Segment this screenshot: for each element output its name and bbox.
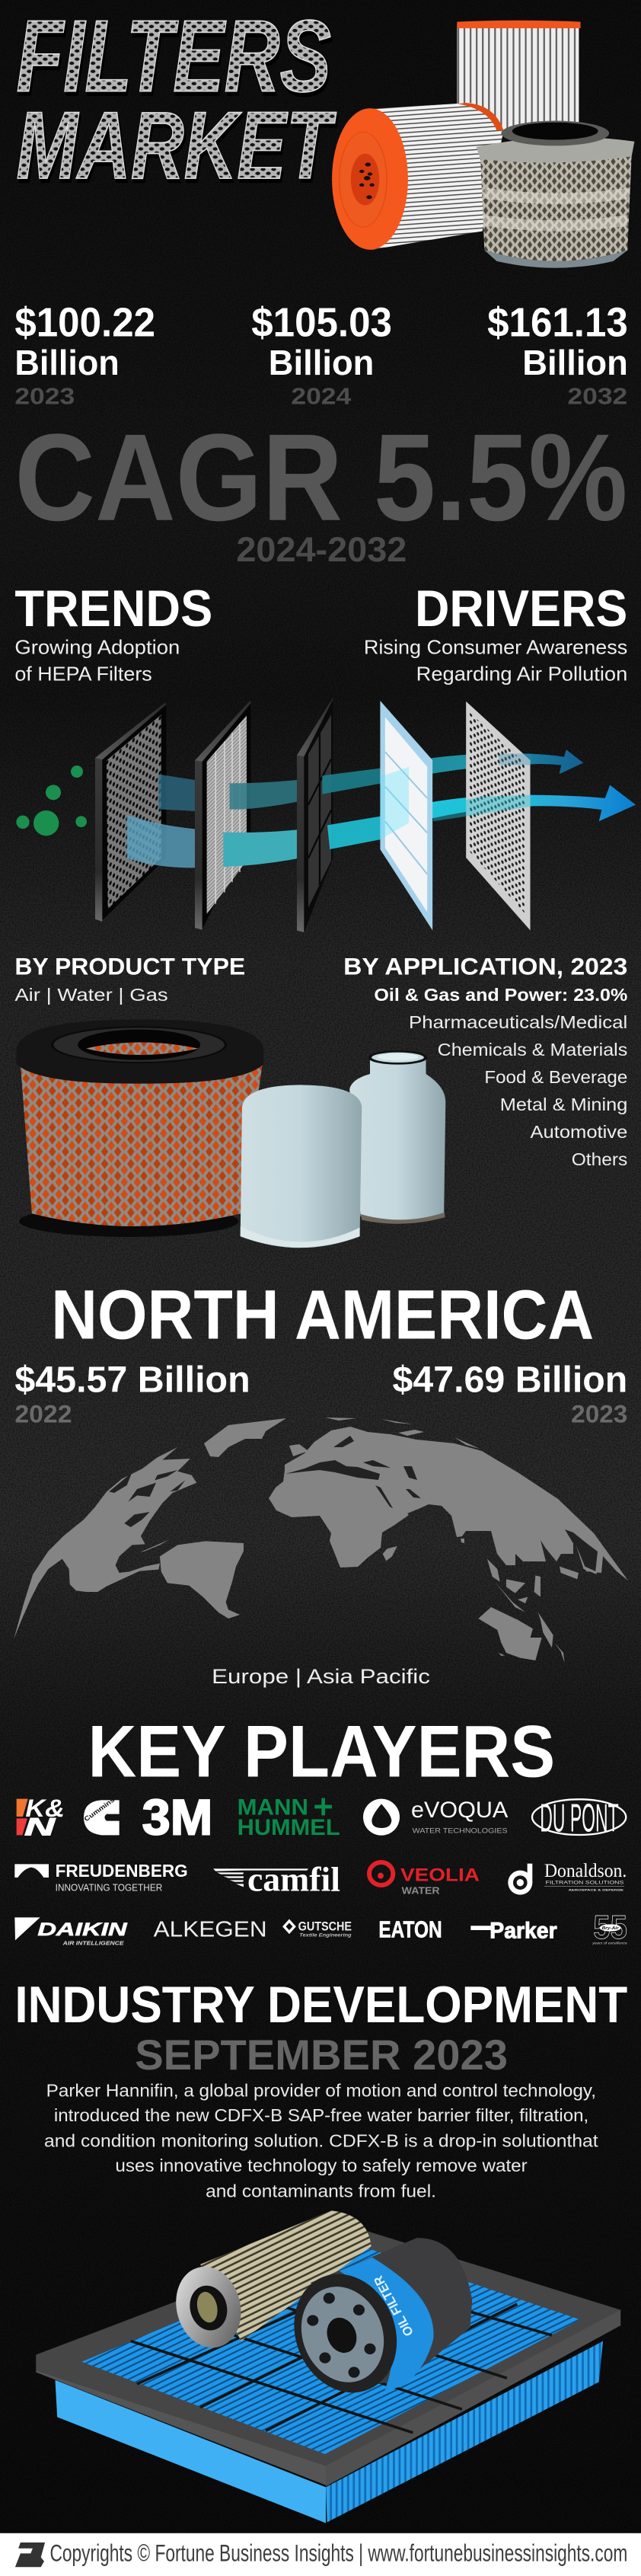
air flow bands through first layers [127, 766, 396, 868]
stat: 2032 value [487, 300, 628, 409]
logo: Veolia: VEOLIA [400, 1865, 480, 1885]
filter layer 2: pleated grey [195, 701, 251, 930]
block: drivers [364, 580, 627, 686]
logo: Donaldson: FILTRATION SOLUTIONS [546, 1880, 624, 1885]
logo: Parker: Parker [490, 1918, 557, 1943]
logo: Freudenberg: FREUDENBERG [56, 1861, 188, 1881]
uk and arctic slivers [289, 1444, 308, 1456]
islands and australia [383, 1539, 603, 1663]
title: Filters Market perforated metal lettering: MARKET [16, 92, 336, 199]
block: trends [14, 580, 212, 686]
illustration: air passing through filter layers [16, 698, 636, 932]
title: Filters Market perforated metal lettering: MARKET [18, 96, 338, 203]
logo: K&N: K& [25, 1795, 65, 1822]
logo: Daikin: DAIKIN [37, 1919, 128, 1940]
paragraph: and contaminants from fuel. [206, 2181, 436, 2201]
logo: Veolia: WATER [402, 1886, 440, 1897]
logo: Gutsche: Textile Engineering [299, 1933, 352, 1938]
stat: 2023 value [14, 300, 155, 409]
image: oil filter: OIL FILTER [371, 2274, 416, 2338]
block: trends: of HEPA Filters [14, 663, 152, 686]
logo: Gutsche [284, 1919, 352, 1938]
logo: K&N: N [24, 1813, 56, 1840]
greenland [204, 1418, 286, 1457]
world map [14, 1417, 628, 1663]
key players section [14, 1711, 627, 1946]
stat: 2024 value: Billion [269, 343, 374, 382]
icon: green particles [16, 765, 87, 836]
logo: Eaton: EATON [378, 1917, 442, 1943]
logo: Donaldson [508, 1861, 627, 1895]
stat: 2023 value: $100.22 [14, 300, 155, 345]
title and headline values [14, 0, 634, 409]
image: pleated cartridge filter [168, 2210, 372, 2354]
heading: by application list [343, 953, 627, 1169]
stat: 2022 [14, 1360, 250, 1428]
logo: Mann+Hummel: MANN [238, 1795, 308, 1820]
arrow: upper clean air [380, 749, 583, 785]
block: trends: Growing Adoption [14, 636, 180, 659]
stat: 2024 value [251, 300, 392, 409]
logo: Gutsche: GUTSCHE [298, 1919, 352, 1933]
logo: 3M: 3M [142, 1789, 212, 1846]
logo: Cummins: Cummins [83, 1796, 116, 1823]
logo: Bry-Air 55 years: 55 [593, 1910, 627, 1946]
heading: by product type: BY PRODUCT TYPE [14, 953, 245, 980]
logo: Freudenberg [14, 1861, 188, 1893]
segmentation section [14, 953, 627, 1248]
footer [0, 2533, 641, 2576]
logo: Cummins [83, 1796, 120, 1835]
paragraph: Parker Hannifin, a global provider of motion and control technology, [46, 2081, 596, 2101]
image: panel air filter [36, 2230, 620, 2523]
title: Filters Market perforated metal lettering: FILTERS [16, 0, 331, 113]
logo: Bry-Air 55 years: years of excellence [592, 1942, 627, 1946]
filter layer 3: carbon [297, 698, 333, 932]
logo: Mann+Hummel [238, 1795, 340, 1840]
paragraph: uses innovative technology to safely remove water [115, 2156, 528, 2176]
CAGR, trends and drivers text [14, 407, 627, 686]
image: oil filter [279, 2238, 472, 2405]
logo: Daikin: AIR INTELLIGENCE [62, 1939, 125, 1946]
filter layer 5: perforated white [466, 702, 530, 930]
stat: 2022: $45.57 Billion [14, 1360, 250, 1400]
logo: Freudenberg: INNOVATING TOGETHER [56, 1882, 162, 1893]
industry development section [14, 1976, 627, 2523]
logo: Donaldson: Donaldson. [544, 1861, 627, 1881]
title: Filters Market perforated metal lettering: FILTERS [18, 3, 333, 117]
logo: Bry-Air 55 years: Bry-Air [602, 1926, 620, 1931]
paragraph [44, 2081, 598, 2201]
logo: Donaldson: AEROSPACE & DEFENSE [569, 1888, 623, 1892]
paragraph: introduced the new CDFX-B SAP-free water barrier filter, filtration, [54, 2106, 588, 2126]
inland seas [285, 1436, 598, 1573]
stat: 2023 [393, 1360, 627, 1428]
eurasia and africa [269, 1427, 628, 1580]
filter layer 1: dark mesh [95, 703, 166, 922]
label: forecast period: 2024-2032 [236, 530, 407, 569]
image: three cylindrical filters [332, 21, 634, 268]
logo: Mann+Hummel: HUMMEL [238, 1815, 340, 1840]
title: Filters Market perforated metal lettering [16, 0, 338, 203]
image: white spin-on filter [241, 1085, 362, 1248]
heading: by product type: Air | Water | Gas [14, 986, 168, 1005]
logo: Daikin [14, 1917, 128, 1946]
filter layer 4: white with blue frame [380, 701, 432, 930]
stat: 2024 value: $105.03 [251, 300, 392, 345]
stat: 2022: 2022 [14, 1401, 72, 1428]
logo: Veolia [369, 1862, 480, 1897]
image: fuel bottle filter [349, 1051, 445, 1224]
date: September 2023: SEPTEMBER 2023 [135, 2032, 508, 2079]
logo: Evoqua [363, 1798, 509, 1836]
americas [14, 1447, 244, 1639]
logo: Alkegen: ALKEGEN [154, 1918, 267, 1942]
arrow: lower clean air [380, 785, 636, 833]
stat: 2023 value: 2023 [14, 384, 75, 409]
label: other regions: Europe | Asia Pacific [212, 1665, 430, 1688]
paragraph: and condition monitoring solution. CDFX-B is a drop-in solutionthat [44, 2131, 598, 2151]
image: orange air filter [16, 1019, 263, 1237]
logo: Evoqua: WATER TECHNOLOGIES [413, 1827, 508, 1835]
regional figures [14, 1276, 627, 1688]
heading: by product type [14, 953, 245, 1005]
logo: K&N [17, 1795, 65, 1840]
logo: Fortune Business Insights mark [15, 2542, 45, 2567]
logo: Evoqua: eVOQUA [411, 1798, 509, 1823]
logo: Camfil: camfil [247, 1861, 340, 1899]
stat: 2023 value: Billion [14, 343, 120, 382]
block: trends: TRENDS [14, 580, 212, 638]
stat: 2024 value: 2024 [291, 384, 351, 409]
